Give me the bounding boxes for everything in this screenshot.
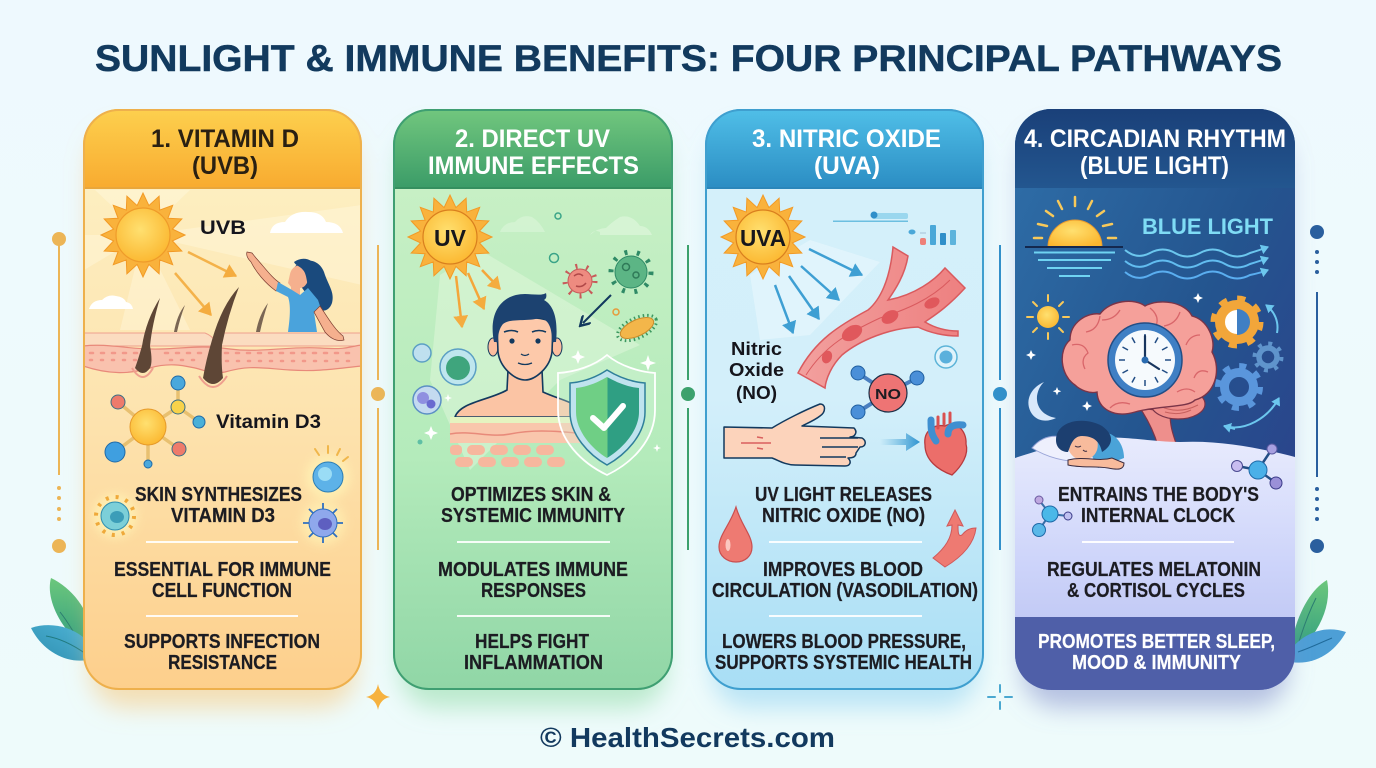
header 3: (UVA) <box>814 152 880 180</box>
benefit: internal clock: INTERNAL CLOCK <box>1081 505 1235 527</box>
benefit: infection: SUPPORTS INFECTION <box>124 631 320 653</box>
cloud right <box>270 212 343 233</box>
sun beams <box>84 190 362 330</box>
connector 1 to 2 <box>371 245 385 550</box>
header 2: 2. DIRECT UV <box>455 125 610 153</box>
vasodilation icon <box>933 510 976 567</box>
benefit: circulation <box>712 559 978 602</box>
vitamin D3 molecule <box>105 376 205 468</box>
label: nitric oxide: Oxide <box>729 359 784 380</box>
person <box>454 293 570 417</box>
immune cells <box>93 446 350 545</box>
benefit: synthesizes: VITAMIN D3 <box>171 505 275 527</box>
benefit: optimizes: OPTIMIZES SKIN & <box>451 484 611 506</box>
benefit: sleep mood immunity: PROMOTES BETTER SLEEP, <box>1038 631 1275 653</box>
benefit: inflammation <box>464 631 603 674</box>
benefit: sleep mood immunity <box>1038 631 1275 674</box>
header 2 <box>393 109 673 189</box>
benefit: melatonin: & CORTISOL CYCLES <box>1067 580 1245 602</box>
cell <box>935 346 957 368</box>
skin cross-section <box>83 333 362 373</box>
blood drop <box>719 507 752 562</box>
benefit: synthesizes <box>135 484 302 527</box>
hand <box>724 404 865 466</box>
panel: 2 direct UV <box>393 109 673 690</box>
clock <box>1108 323 1182 397</box>
benefit: blood pressure: LOWERS BLOOD PRESSURE, <box>722 631 966 653</box>
header 1: (UVB) <box>192 152 258 180</box>
connector 3 to 4 <box>993 245 1007 550</box>
sparkle <box>366 684 390 710</box>
light beam <box>750 240 880 340</box>
woman reaching <box>247 252 344 341</box>
skin strip <box>450 417 585 467</box>
header 3 <box>705 109 984 189</box>
orange gear <box>1214 299 1260 345</box>
benefit: blood pressure: SUPPORTS SYSTEMIC HEALTH <box>715 652 972 674</box>
benefit: essential: ESSENTIAL FOR IMMUNE <box>114 559 331 581</box>
UV arrows <box>175 252 236 315</box>
cloud left <box>89 296 133 309</box>
benefit: infection: RESISTANCE <box>168 652 277 674</box>
header 4: 4. CIRCADIAN RHYTHM <box>1024 125 1286 153</box>
suns above panels <box>101 193 805 279</box>
benefit: releases: UV LIGHT RELEASES <box>755 484 932 506</box>
left side decoration <box>52 232 66 553</box>
header 1 <box>83 109 362 189</box>
header 2: IMMUNE EFFECTS <box>428 152 639 180</box>
sun 3 with UVA label: UVA <box>740 225 786 251</box>
benefit: sleep mood immunity: MOOD & IMMUNITY <box>1072 652 1242 674</box>
label: UVB: UVB <box>200 218 246 239</box>
arrow to heart <box>880 433 920 451</box>
UV arrows <box>775 249 862 333</box>
heart <box>925 413 967 475</box>
connector 2 to 3 <box>681 245 695 550</box>
UV arrows <box>456 270 500 327</box>
molecule top right <box>1232 444 1282 489</box>
blue light label: BLUE LIGHT <box>1142 214 1274 239</box>
rising sun <box>1025 197 1123 276</box>
light waves <box>1125 247 1268 278</box>
bottom band <box>1015 617 1295 690</box>
benefit: circulation: IMPROVES BLOOD <box>763 559 923 581</box>
blanket and lower background <box>1015 438 1295 690</box>
right side decoration <box>1310 225 1324 553</box>
NO molecule <box>851 366 924 419</box>
benefit: circulation: CIRCULATION (VASODILATION) <box>712 580 978 602</box>
benefit: infection <box>124 631 320 674</box>
sun 3 with UVA label <box>721 195 805 279</box>
crosshair sparkle <box>988 685 1012 709</box>
benefit: internal clock: ENTRAINS THE BODY'S <box>1058 484 1259 506</box>
cycle arrows <box>1224 305 1279 429</box>
molecule left <box>1032 496 1072 536</box>
mini chart <box>833 212 956 245</box>
benefit: essential <box>114 559 331 602</box>
NO molecule: NO <box>875 386 901 403</box>
label: nitric oxide: Nitric <box>731 338 782 359</box>
moon and stars <box>1026 293 1203 421</box>
header 1: 1. VITAMIN D <box>151 125 299 153</box>
brain <box>1062 301 1217 446</box>
blood vessel <box>798 247 965 388</box>
right leaves <box>1290 580 1346 663</box>
benefit: inflammation: INFLAMMATION <box>464 652 603 674</box>
sun 1 <box>101 193 185 277</box>
small sun <box>1027 295 1069 339</box>
benefit: optimizes: SYSTEMIC IMMUNITY <box>441 505 626 527</box>
shield <box>558 355 655 475</box>
label: nitric oxide <box>729 338 784 403</box>
panel: 3 nitric oxide <box>705 109 984 690</box>
panel: 1 vitamin D <box>83 109 362 690</box>
sun 2 with UV label: UV <box>434 225 467 251</box>
label: nitric oxide: (NO) <box>736 382 777 403</box>
panel: 4 circadian rhythm <box>1015 109 1295 690</box>
benefit: modulates: RESPONSES <box>481 580 586 602</box>
benefit: blood pressure <box>715 631 972 674</box>
panel shadows <box>90 130 1288 708</box>
benefit: melatonin: REGULATES MELATONIN <box>1047 559 1261 581</box>
clouds <box>500 216 652 235</box>
footer credit: © HealthSecrets.com <box>540 722 835 753</box>
title: SUNLIGHT & IMMUNE BENEFITS: FOUR PRINCIPAL PATHWAYS <box>95 38 1282 79</box>
benefit: inflammation: HELPS FIGHT <box>475 631 589 653</box>
header 3: 3. NITRIC OXIDE <box>752 125 941 153</box>
left leaves <box>31 578 92 661</box>
benefit: modulates <box>438 559 628 602</box>
benefit: melatonin <box>1047 559 1261 602</box>
sun 2 with UV label <box>408 195 492 279</box>
small gear <box>1254 344 1282 370</box>
benefit: optimizes <box>441 484 626 527</box>
benefit: synthesizes: SKIN SYNTHESIZES <box>135 484 302 506</box>
benefit: releases <box>755 484 932 527</box>
benefit: releases: NITRIC OXIDE (NO) <box>762 505 925 527</box>
benefit: internal clock <box>1058 484 1259 527</box>
light beam <box>430 250 640 470</box>
benefit: modulates: MODULATES IMMUNE <box>438 559 628 581</box>
header 4 <box>1015 109 1295 188</box>
sleeping woman <box>1032 421 1124 469</box>
sparkles <box>418 350 661 452</box>
small floating circles <box>550 213 619 315</box>
viruses and bacterium <box>565 252 660 346</box>
pathogen arrow <box>583 295 611 323</box>
immune cells <box>413 344 476 414</box>
header 4: (BLUE LIGHT) <box>1080 152 1229 180</box>
blue gear <box>1218 366 1260 408</box>
label: Vitamin D3: Vitamin D3 <box>216 412 321 433</box>
hair follicles <box>132 287 268 387</box>
benefit: essential: CELL FUNCTION <box>152 580 292 602</box>
